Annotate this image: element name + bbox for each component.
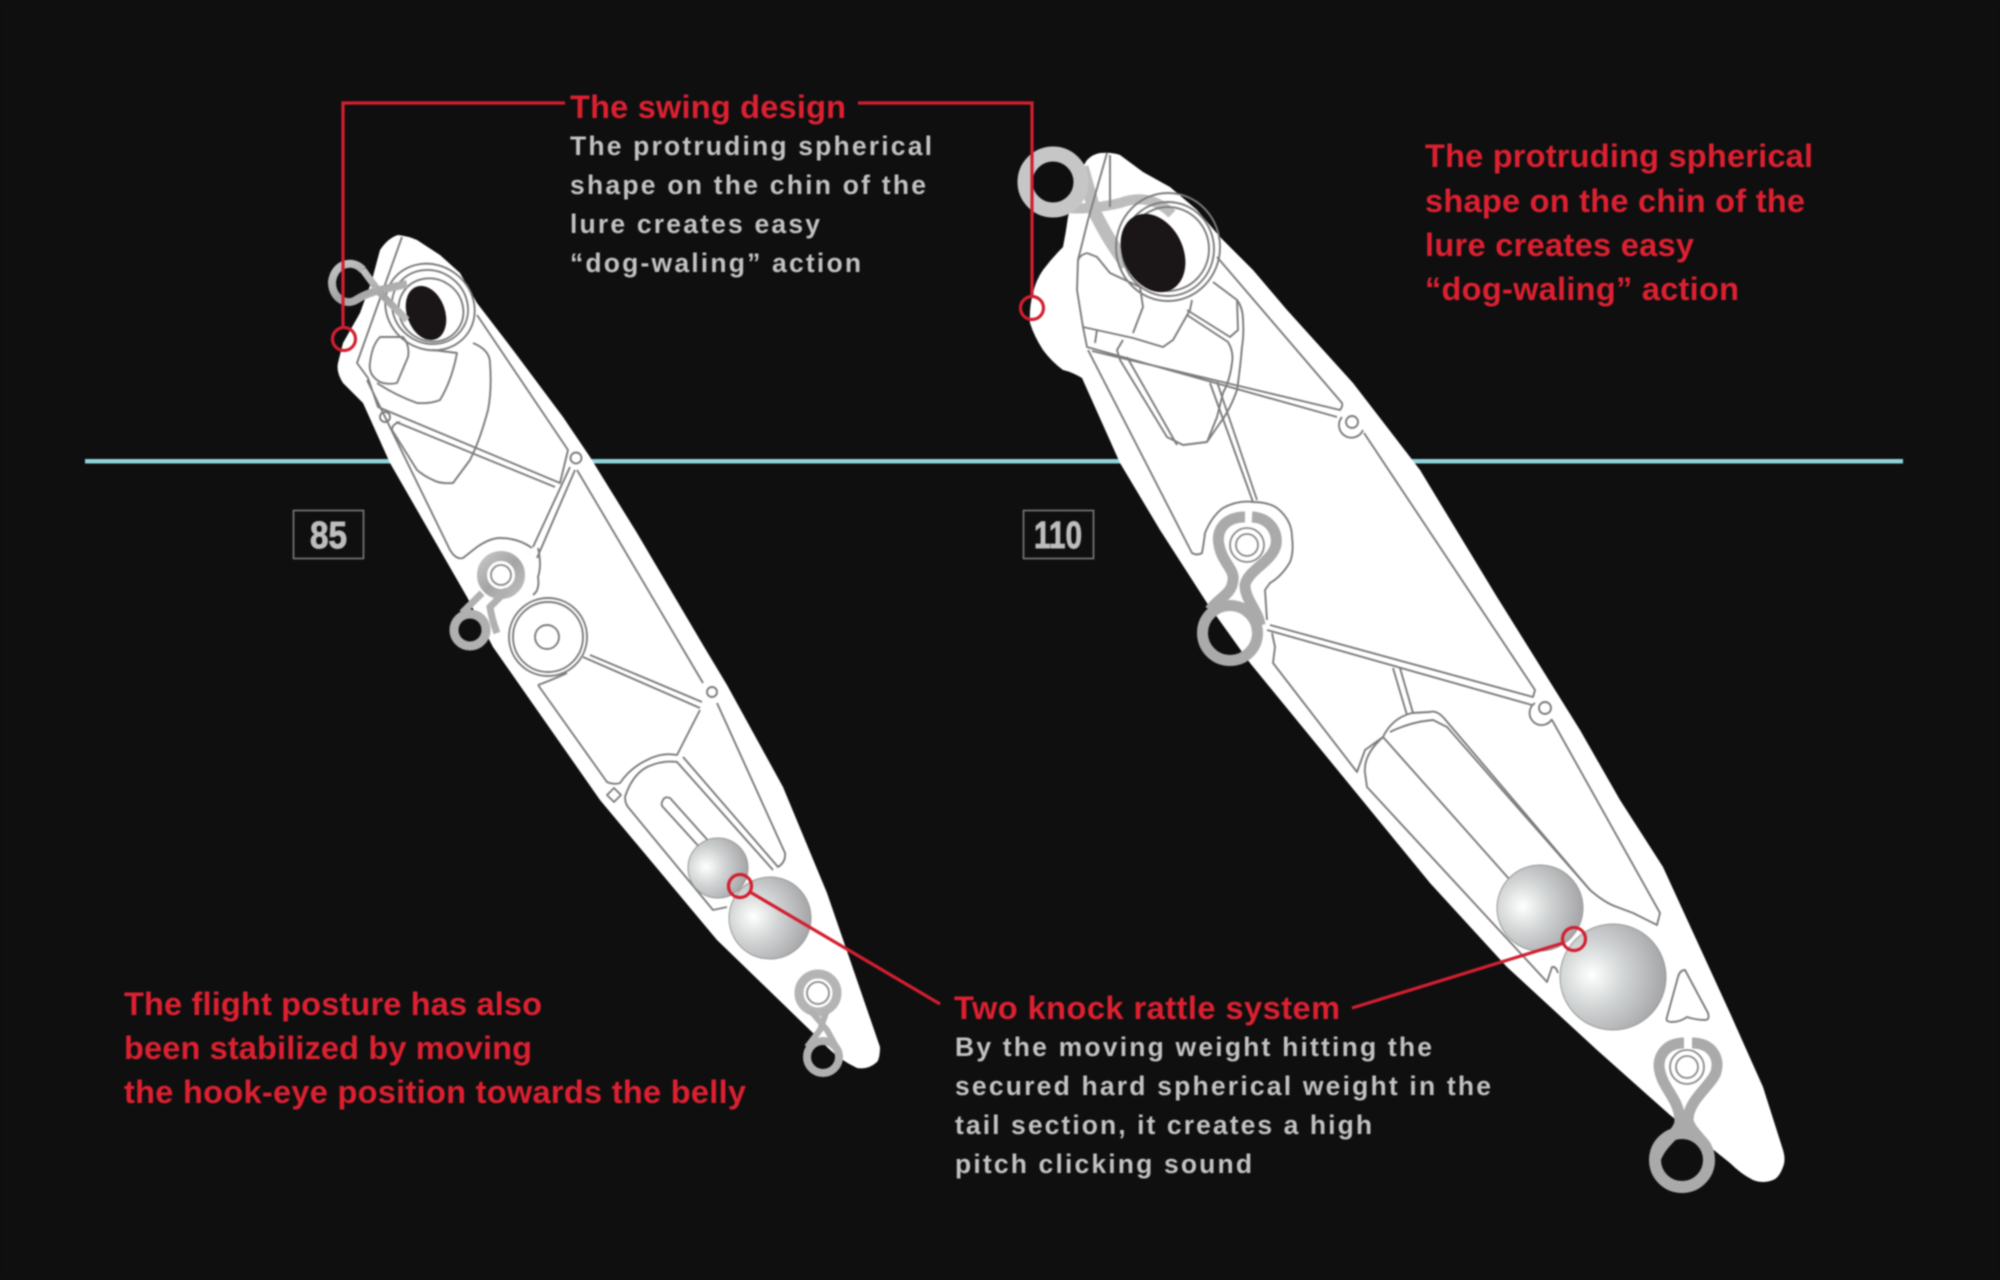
callout: two knock rattle system — [954, 990, 1491, 1179]
rattle leader lines — [728, 874, 1586, 1008]
callout: swing design: The swing design — [570, 89, 846, 125]
size label 85 — [294, 510, 364, 558]
lure 110 internal frame lines — [1077, 153, 1709, 1022]
lure 110 eye — [1108, 193, 1220, 303]
red note bottom left: The flight posture has also — [124, 986, 542, 1022]
lure 110 body silhouette — [1030, 153, 1784, 1182]
callout: two knock rattle system: tail section, it creates a high — [955, 1110, 1372, 1140]
callout: two knock rattle system: By the moving weight hitting the — [955, 1032, 1432, 1062]
red note top right: lure creates easy — [1425, 227, 1694, 263]
lure 85 — [332, 235, 880, 1073]
lure 85 tail hook eye — [799, 974, 839, 1073]
lure 110 — [1025, 153, 1784, 1187]
callout: swing design: lure creates easy — [570, 209, 820, 239]
lure 110 rattle balls — [1497, 865, 1666, 1030]
callout: swing design: The protruding spherical — [570, 131, 932, 161]
red note top right: shape on the chin of the — [1425, 183, 1805, 219]
lure 85 nose ring — [332, 264, 407, 320]
red note top right — [1425, 138, 1813, 307]
red note top right: The protruding spherical — [1425, 138, 1813, 174]
callout: two knock rattle system: secured hard spherical weight in the — [955, 1071, 1491, 1101]
red note bottom left: been stabilized by moving — [124, 1030, 532, 1066]
lure 110 belly hook eye — [1202, 517, 1276, 660]
swing design leader lines — [332, 103, 1044, 350]
red note top right: “dog-waling” action — [1425, 271, 1739, 307]
lure 85 rattle balls — [688, 838, 811, 959]
callout: swing design — [570, 89, 932, 278]
callout: swing design: shape on the chin of the — [570, 170, 926, 200]
lure 110 tail hook eye — [1655, 1043, 1717, 1187]
waterline — [85, 459, 1903, 464]
lure 110 nose ring — [1025, 154, 1081, 210]
size label 85: 85 — [310, 515, 347, 557]
lure 85 eye — [368, 246, 492, 368]
lure 85 internal frame lines — [357, 237, 785, 910]
lure 85 body silhouette — [338, 235, 880, 1068]
red note bottom left: the hook-eye position towards the belly — [124, 1074, 746, 1110]
lure 110 gill gray bands — [1068, 167, 1172, 265]
size label 110: 110 — [1034, 515, 1082, 557]
callout: two knock rattle system: pitch clicking sound — [955, 1149, 1252, 1179]
red note bottom left — [124, 986, 746, 1110]
callout: swing design: “dog-waling” action — [570, 248, 861, 278]
callout: two knock rattle system: Two knock rattle system — [954, 990, 1340, 1026]
lure 85 belly hook eye — [454, 556, 520, 646]
